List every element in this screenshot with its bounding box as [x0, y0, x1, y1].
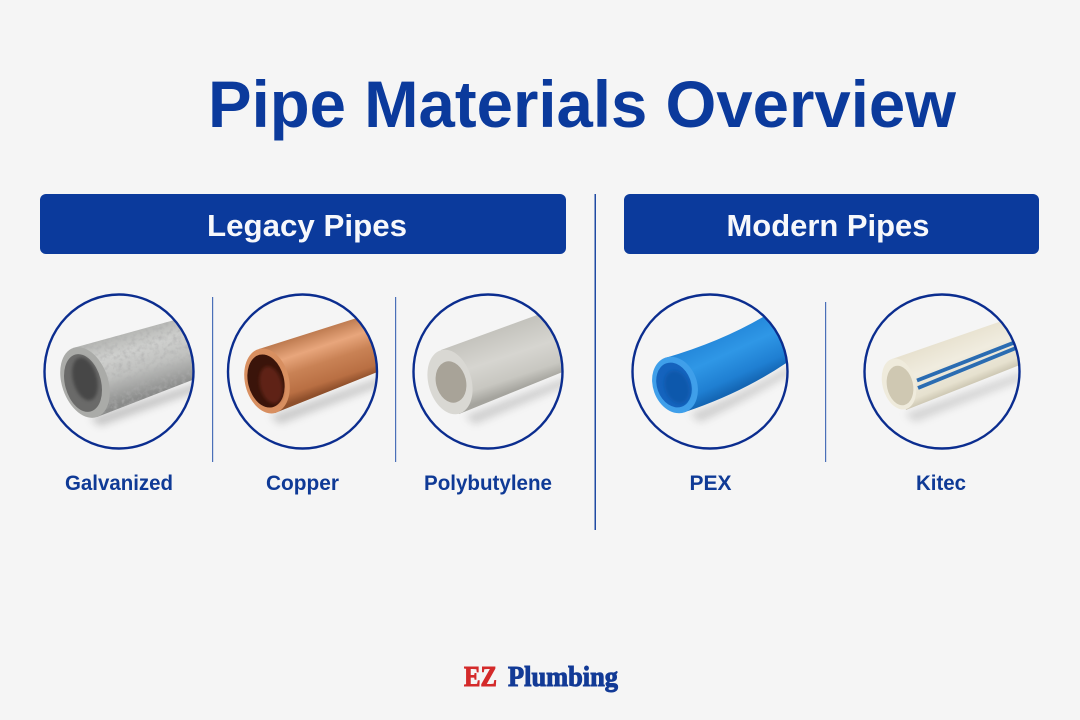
logo: EZ Plumbing [464, 661, 618, 693]
icon: copper pipe [228, 294, 385, 448]
icon: polybutylene pipe [414, 294, 570, 448]
pipe item: Polybutylene [414, 294, 570, 495]
infographic canvas [40, 79, 1039, 692]
section header: Modern Pipes: Modern Pipes [726, 208, 930, 243]
label: Kitec [916, 472, 966, 495]
section header: Legacy Pipes [40, 194, 566, 254]
label: Polybutylene [424, 472, 552, 495]
logo: EZ Plumbing: Plumbing [508, 662, 618, 693]
pipe item: Galvanized [44, 294, 200, 495]
section header: Modern Pipes [624, 194, 1039, 254]
pipe item: Copper [228, 294, 385, 495]
icon: blue PEX pipe [632, 294, 792, 448]
icon: galvanized steel pipe [44, 294, 200, 448]
icon: cream Kitec pipe with blue stripes [864, 294, 1025, 448]
label: Copper [266, 472, 339, 495]
pipe item: Kitec [864, 294, 1025, 495]
pipe item: PEX [632, 294, 792, 495]
label: PEX [690, 472, 732, 495]
logo: EZ Plumbing: EZ [464, 661, 497, 693]
title: Pipe Materials Overview [208, 67, 957, 141]
label: Galvanized [65, 472, 173, 495]
section header: Legacy Pipes: Legacy Pipes [207, 208, 407, 243]
